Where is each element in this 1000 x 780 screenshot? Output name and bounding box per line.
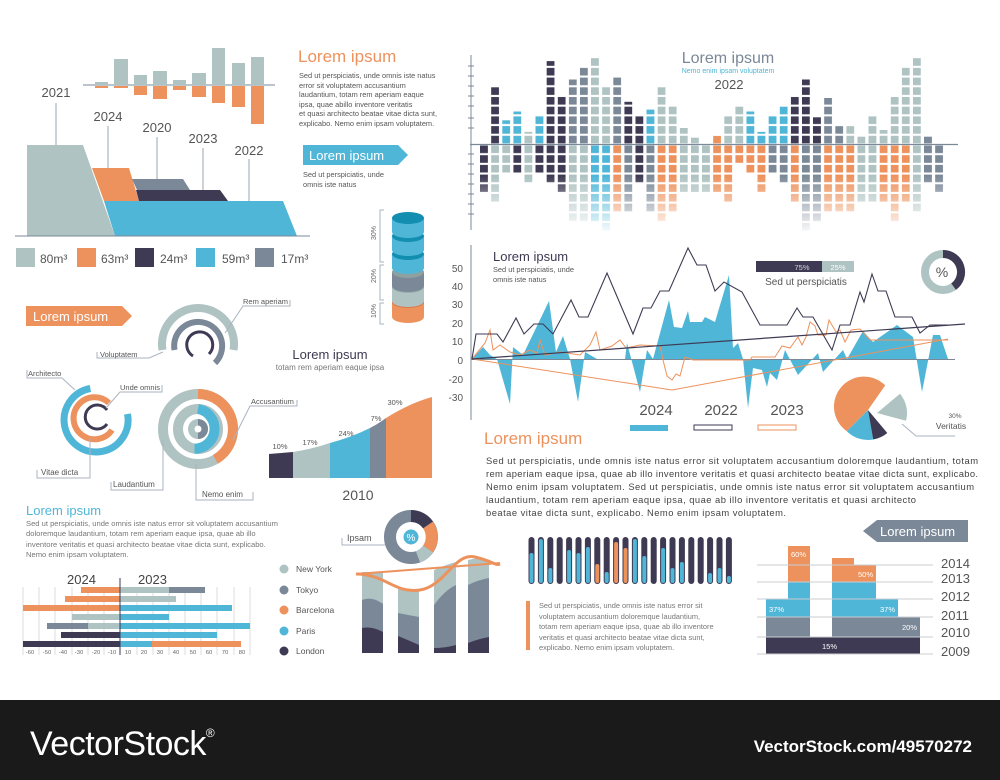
chart: mountain area chart with year pins: 2020 <box>143 120 171 135</box>
footer: watermark bar <box>0 700 1000 780</box>
chart: equalizer 2022: 2022 <box>715 77 743 92</box>
footer: watermark bar: ® <box>206 726 215 740</box>
text block: big orange heading paragraph <box>484 429 978 518</box>
footer: watermark bar: VectorStock <box>30 725 206 763</box>
legend: volumes: 17m³ <box>281 252 308 266</box>
text block: top orange heading: Sed ut perspiciatis, unde omnis iste natus <box>299 71 436 80</box>
chart: diverging bar chart 2024/2023: 80 <box>239 650 245 656</box>
chart: diverging bar chart 2024/2023: -40 <box>59 650 67 656</box>
chart: line and area chart: 50 <box>452 264 463 275</box>
icon: percent donut <box>925 254 961 290</box>
chart: diverging bar chart 2024/2023: 70 <box>222 650 228 656</box>
chart: stepped stacked chart 2009-2014: 15% <box>822 642 837 651</box>
chart: mountain area chart with year pins: 2021 <box>42 85 70 100</box>
chart: nested arcs: Rem aperiam <box>243 297 288 306</box>
text block: bottom-center paragraph <box>526 601 714 652</box>
chart: exploded pie: Veritatis <box>936 421 966 431</box>
chart: diverging bar chart 2024/2023: -30 <box>75 650 83 656</box>
chart: ring donut: Laudantium <box>113 480 155 489</box>
chart: diverging bar chart 2024/2023: 30 <box>157 650 163 656</box>
text block: top orange heading: Lorem ipsum <box>298 47 396 66</box>
legend: volumes: 24m³ <box>160 252 187 266</box>
chart: diverging bar chart 2024/2023: 50 <box>190 650 196 656</box>
legend: cities: Barcelona <box>296 605 335 615</box>
chart: diverging bar chart 2024/2023: -20 <box>92 650 100 656</box>
chart: mountain area chart with year pins <box>15 85 310 236</box>
chart: exploded pie: 30% <box>948 413 962 420</box>
chart: diverging bar chart 2024/2023 <box>23 572 250 656</box>
progress bar: 75/25: 75% <box>794 263 810 272</box>
legend: volumes: 59m³ <box>222 252 249 266</box>
chart: stacked cylinder <box>371 210 424 324</box>
text block: top orange heading: error sit voluptatem accusantium <box>299 81 406 90</box>
text block: bottom-left blue heading: doloremque laudantium, totam rem aperiam eaque ipsa, quae ab illo <box>26 529 256 538</box>
text block: big orange heading paragraph: beatae vitae dicta sunt, explicabo. Nemo enim ipsam voluptatem. <box>486 507 786 518</box>
text block: bottom-center paragraph: voluptatem accusantium doloremque laudantium, <box>539 612 700 621</box>
chart: line and area chart: Lorem ipsum <box>493 249 568 264</box>
chart: curved growth bar 2010: totam rem aperiam eaque ipsa <box>276 363 385 372</box>
chart: ring donut: Accusantium <box>251 397 294 406</box>
chart: mountain area chart with year pins: 2022 <box>235 143 263 158</box>
chart: nested arcs <box>97 297 290 363</box>
chart: line and area chart: 30 <box>452 300 463 311</box>
text block: top orange heading <box>298 47 437 128</box>
chart: diverging bar chart 2024/2023: -60 <box>26 650 34 656</box>
callout: orange arrow tag: Lorem ipsum <box>33 309 108 324</box>
text block: top orange heading: laudantium, totam rem aperiam eaque <box>299 90 424 99</box>
chart: stepped stacked chart 2009-2014 <box>757 546 970 659</box>
chart: line and area chart: 40 <box>452 282 463 293</box>
callout: blue arrow tag <box>303 145 408 189</box>
chart: stepped stacked chart 2009-2014: 2009 <box>941 644 970 659</box>
text block: big orange heading paragraph: Lorem ipsum <box>484 429 582 448</box>
text block: top orange heading: ipsa, quae abillo inventore veritatis <box>299 100 413 109</box>
chart: line and area chart <box>449 245 965 420</box>
chart: curved growth bar 2010: 17% <box>302 438 318 447</box>
legend: cities: Tokyo <box>296 585 318 595</box>
chart: diverging bar chart 2024/2023: -50 <box>43 650 51 656</box>
legend: cities: Paris <box>296 626 315 636</box>
callout: blue arrow tag: omnis iste natus <box>303 180 357 189</box>
chart: stepped stacked chart 2009-2014: 50% <box>858 570 873 579</box>
text block: bottom-left blue heading: Nemo enim ipsam voluptatem. <box>26 550 129 559</box>
chart: nested arcs: Voluptatem <box>100 350 138 359</box>
icon: percent donut: % <box>936 264 948 280</box>
chart: stepped stacked chart 2009-2014: 37% <box>880 605 895 614</box>
progress bar: 75/25: 25% <box>830 263 846 272</box>
chart: exploded pie <box>834 377 966 440</box>
chart: concentric C rings <box>27 369 162 478</box>
chart: concentric C rings: Unde omnis <box>120 383 160 392</box>
chart: curved growth bar 2010: 7% <box>371 414 382 423</box>
legend: cities: New York <box>296 564 333 574</box>
chart: concentric C rings: Vitae dicta <box>41 468 79 477</box>
chart: diverging bar chart 2024/2023: 60 <box>206 650 212 656</box>
text block: bottom-left blue heading: inventore veritatis et quasi architecto beatae vitae dicta sunt, explicabo. <box>26 540 266 549</box>
chart: diverging bar chart 2024/2023: -10 <box>108 650 116 656</box>
text block: top orange heading: explicabo. Nemo enim ipsam voluptatem. <box>299 119 434 128</box>
chart: stepped stacked chart 2009-2014: 37% <box>769 605 784 614</box>
chart: stepped stacked chart 2009-2014: 2013 <box>941 571 970 586</box>
text block: big orange heading paragraph: laudantium, totam rem aperiam eaque ipsa, quae ab illo inventore veritatis et quasi architecto <box>486 494 916 505</box>
text block: bottom-left blue heading: Lorem ipsum <box>26 503 101 518</box>
text block: bottom-center paragraph: explicabo. Nemo enim ipsam voluptatem. <box>539 643 674 652</box>
legend: line chart years: 2023 <box>770 402 804 419</box>
text block: bottom-center paragraph: veritatis et quasi architecto beatae vitae dicta sunt, <box>539 633 705 642</box>
legend: cities: London <box>296 646 325 656</box>
text block: top orange heading: et quasi architecto beatae vitae dicta sunt, <box>299 109 437 118</box>
chart: equalizer 2022: Lorem ipsum <box>682 50 774 67</box>
chart: line and area chart: -30 <box>449 393 463 404</box>
text block: bottom-center paragraph: totam rem aperiam eaque ipsa, quae ab illo inventore <box>539 622 714 631</box>
chart: equalizer 2022: Nemo enim ipsam voluptatem <box>682 68 774 75</box>
chart: wavy stacked bars <box>356 556 500 653</box>
callout: slate arrow tag <box>863 520 968 542</box>
chart: equalizer 2022 <box>468 50 958 232</box>
chart: diverging bar chart 2024/2023: 2023 <box>138 572 167 587</box>
chart: curved growth bar 2010 <box>269 347 432 503</box>
legend: cities <box>280 564 335 656</box>
chart: diverging bar chart 2024/2023: 2024 <box>67 572 96 587</box>
panel: top-left mini bar chart <box>83 48 275 124</box>
chart: line and area chart: omnis iste natus <box>493 275 547 284</box>
chart: curved growth bar 2010: 2010 <box>342 487 374 503</box>
legend: line chart years <box>630 402 804 431</box>
chart: capsule level bars <box>528 537 732 584</box>
chart: diverging bar chart 2024/2023: 40 <box>173 650 179 656</box>
legend: line chart years: 2024 <box>639 402 673 419</box>
chart: line and area chart: 10 <box>452 337 463 348</box>
chart: concentric C rings: Architecto <box>28 369 61 378</box>
chart: stepped stacked chart 2009-2014: 2011 <box>941 608 969 623</box>
callout: blue arrow tag: Lorem ipsum <box>309 148 384 163</box>
chart: stepped stacked chart 2009-2014: 2012 <box>941 589 970 604</box>
chart: Ipsam donut: % <box>407 533 416 544</box>
text block: big orange heading paragraph: rem aperiam eaque ipsa, quae ab illo inventore veritatis et quasi architecto beatae vitae dicta sunt, explicabo. <box>486 468 978 479</box>
callout: slate arrow tag: Lorem ipsum <box>880 524 955 539</box>
chart: line and area chart: -20 <box>449 375 463 386</box>
chart: curved growth bar 2010: Lorem ipsum <box>292 347 368 362</box>
chart: stepped stacked chart 2009-2014: 2014 <box>941 556 970 571</box>
callout: blue arrow tag: Sed ut perspiciatis, unde <box>303 170 384 179</box>
chart: ring donut <box>111 394 297 500</box>
chart: mountain area chart with year pins: 2024 <box>94 109 122 124</box>
chart: diverging bar chart 2024/2023: 20 <box>141 650 147 656</box>
chart: Ipsam donut <box>342 516 432 558</box>
text block: big orange heading paragraph: Nemo enim ipsam voluptatem. Sed ut perspiciatis, unde omnis iste natus error sit voluptatem accusantium <box>486 481 974 492</box>
chart: Ipsam donut: Ipsam <box>347 533 372 543</box>
chart: line and area chart: 20 <box>452 319 463 330</box>
text block: bottom-center paragraph: Sed ut perspiciatis, unde omnis iste natus error sit <box>539 601 702 610</box>
progress bar: 75/25: Sed ut perspiciatis <box>765 277 847 288</box>
footer: watermark bar: VectorStock.com/49570272 <box>754 737 972 756</box>
chart: stepped stacked chart 2009-2014: 60% <box>791 550 806 559</box>
chart: line and area chart: 0 <box>457 356 463 367</box>
chart: diverging bar chart 2024/2023: 10 <box>125 650 131 656</box>
chart: ring donut: Nemo enim <box>202 490 243 499</box>
legend: volumes <box>16 248 308 267</box>
chart: line and area chart: Sed ut perspiciatis, unde <box>493 265 574 274</box>
legend: volumes: 80m³ <box>40 252 67 266</box>
text block: bottom-left blue heading <box>26 503 278 559</box>
chart: stepped stacked chart 2009-2014: 2010 <box>941 625 970 640</box>
chart: stacked cylinder: 10% <box>371 304 378 318</box>
legend: line chart years: 2022 <box>704 402 738 419</box>
text block: bottom-left blue heading: Sed ut perspiciatis, unde omnis iste natus error sit voluptatem accusantium <box>26 519 278 528</box>
chart: mountain area chart with year pins: 2023 <box>189 131 217 146</box>
chart: curved growth bar 2010: 10% <box>272 442 288 451</box>
callout: orange arrow tag <box>26 306 132 326</box>
chart: stepped stacked chart 2009-2014: 20% <box>902 623 917 632</box>
text block: big orange heading paragraph: Sed ut perspiciatis, unde omnis iste natus error sit voluptatem accusantium doloremque laudantium, totam <box>486 455 978 466</box>
progress bar: 75/25 <box>756 261 854 288</box>
legend: volumes: 63m³ <box>101 252 128 266</box>
chart: curved growth bar 2010: 24% <box>338 429 354 438</box>
chart: curved growth bar 2010: 30% <box>387 398 403 407</box>
chart: stacked cylinder: 30% <box>371 226 378 240</box>
chart: stacked cylinder: 20% <box>371 269 378 283</box>
